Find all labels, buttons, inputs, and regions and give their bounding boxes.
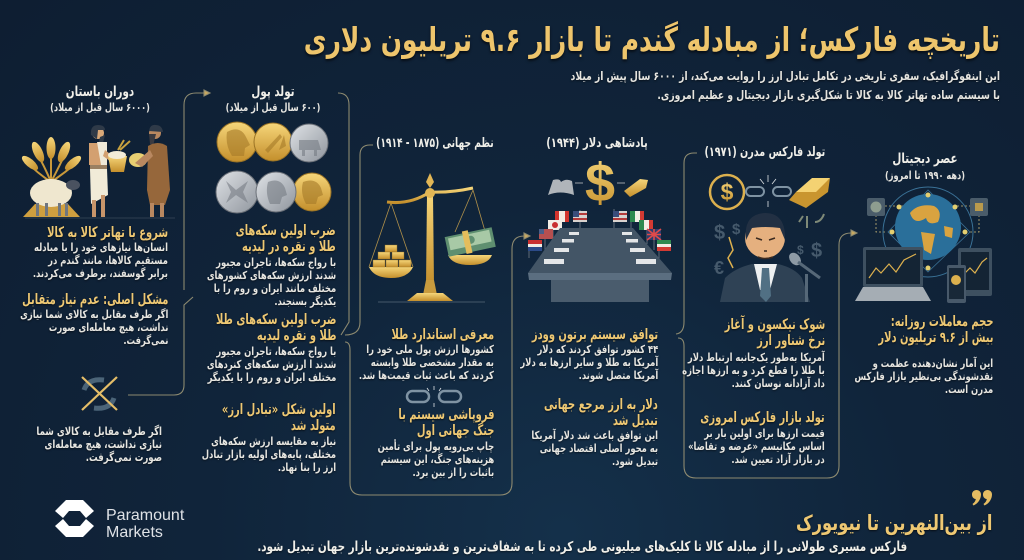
body: این توافق باعث شد دلار آمریکا	[531, 429, 658, 442]
heading: world order: نظم جهانی (۱۸۷۵ - ۱۹۱۴)	[376, 136, 494, 151]
intro text	[571, 69, 1000, 104]
icon: nixon, dollar and gold: $	[797, 243, 804, 257]
icon: nixon, dollar and gold: $	[732, 221, 741, 238]
wordmark: Markets	[106, 524, 163, 541]
body: یکدیگر بسنجند.	[274, 295, 336, 308]
body: با طلا را قطع کرد و به ارزها اجازه	[682, 364, 825, 377]
icon: broken chain	[406, 386, 462, 407]
subheading: بیش از ۹.۶ تریلیون دلار	[878, 330, 993, 346]
logo: Paramount Markets	[55, 500, 185, 538]
date: ancient era: (۶۰۰۰ سال قبل از میلاد)	[50, 101, 150, 114]
body	[682, 350, 825, 391]
heading: dollar empire: پادشاهی دلار (۱۹۴۴)	[546, 136, 648, 151]
body: آمریکا به طلا و سایر ارزها به دلار	[520, 356, 658, 369]
body: مختلف ایران و روم را با یکدیگر	[207, 371, 336, 384]
icon: nixon, dollar and gold: $	[714, 222, 725, 244]
icon: bretton woods table with flags: $	[585, 153, 615, 213]
heading: ancient era: دوران باستان	[66, 84, 134, 100]
body	[207, 256, 336, 309]
icon: nixon, dollar and gold: €	[714, 258, 724, 278]
body: در بازار آزاد تعیین شد.	[732, 453, 825, 466]
subheading: طلا و نقره در لیدیه	[242, 239, 336, 255]
closing quote block	[250, 488, 995, 558]
body	[20, 308, 168, 348]
text: first coins repeat	[207, 312, 336, 385]
body: با رواج سکه‌ها، تاجران مجبور	[216, 256, 336, 269]
panel: dollar empire	[520, 136, 672, 470]
subheading: ضرب اولین سکه‌های	[236, 223, 336, 239]
body: به مقدار مشخصی طلا وابسته	[371, 356, 494, 369]
body: کردند که باعث ثبات قیمت‌ها شد.	[359, 369, 494, 382]
text: modern forex birth	[694, 410, 825, 468]
icon: crossed exchange arrows	[81, 376, 118, 411]
text: first coins	[207, 223, 336, 309]
subheading	[222, 402, 336, 435]
subheading: دلار به ارز مرجع جهانی	[544, 397, 658, 413]
icon: nixon, dollar and gold	[708, 174, 830, 302]
subheading: توافق سیستم برتون وودز	[532, 327, 658, 343]
body: آمریکا متصل شوند.	[578, 369, 658, 382]
body	[202, 435, 336, 475]
body: ارز را بنا نهاد.	[278, 461, 336, 474]
date: digital age: (دهه ۱۹۹۰ تا امروز)	[885, 169, 965, 182]
closing heading: از بین‌النهرین تا نیویورک	[796, 511, 992, 535]
body	[377, 439, 494, 480]
subheading: فروپاشی سیستم با	[398, 407, 494, 423]
subheading	[398, 407, 494, 440]
wordmark	[106, 507, 184, 541]
body: مختلف مانند ایران و روم را با	[214, 282, 336, 295]
body	[688, 427, 825, 466]
text: daily volume	[852, 314, 993, 398]
subheading: مشکل اصلی: عدم نیاز متقابل	[22, 292, 168, 308]
subheading: نرخ شناور ارز	[757, 333, 825, 349]
date: birth of money: (۶۰۰ سال قبل از میلاد)	[226, 101, 320, 114]
text: dollar reserve	[531, 397, 658, 470]
text: bretton woods	[520, 327, 658, 384]
icon: barter scene	[22, 125, 175, 218]
subheading: معرفی استاندارد طلا	[391, 327, 494, 343]
callout text: اگر طرف مقابل به کالای شما	[36, 424, 162, 438]
heading: digital age: عصر دیجیتال	[892, 151, 958, 167]
text: barter start	[33, 225, 168, 281]
subheading: تولد بازار فارکس امروزی	[701, 410, 825, 426]
body: مختلف، پایه‌های اولیه بازار تبادل	[202, 448, 336, 461]
wordmark: Paramount	[106, 507, 184, 524]
subheading: شوک نیکسون و آغاز	[724, 317, 825, 333]
intro text: با سیستم ساده تهاتر کالا به کالا تا شکل‌گیری بازار دیجیتال و عظیم امروزی.	[657, 88, 1000, 102]
text: first currency exchange	[202, 402, 336, 475]
callout text: نیازی نداشت، هیچ معامله‌ای	[44, 437, 162, 451]
panel: world order	[359, 136, 496, 480]
body: مدرن است.	[945, 383, 993, 396]
subheading	[216, 312, 336, 345]
subheading	[724, 315, 825, 350]
subheading: حجم معاملات روزانه:	[890, 314, 993, 330]
subheading: طلا و نقره لیدیه	[257, 328, 336, 344]
body: کشورها ارزش پول ملی خود را	[366, 343, 494, 356]
subheading: متولد شد	[291, 418, 336, 434]
body: نمی‌گرفت.	[123, 334, 168, 347]
subheading: ضرب اولین سکه‌های طلا	[216, 312, 336, 328]
body: آمریکا به‌طور یک‌جانبه ارتباط دلار	[688, 351, 825, 364]
body: تبدیل شود.	[612, 455, 658, 468]
body	[359, 343, 494, 384]
body: ۴۴ کشور توافق کردند که دلار	[537, 343, 658, 356]
panel: ancient era	[20, 84, 175, 466]
subheading: جنگ جهانی اول	[416, 423, 494, 439]
title: تاریخچه فارکس؛ از مبادله گندم تا بازار ۹.۶ تریلیون دلاری	[304, 20, 1000, 59]
body: برابر گوسفند، برطرف می‌کردند.	[33, 267, 168, 280]
body: چاپ بی‌رویه پول برای تأمین	[377, 440, 494, 453]
callout text: صورت نمی‌گرفت.	[86, 450, 162, 464]
body	[531, 428, 658, 470]
intro text: این اینفوگرافیک، سفری تاریخی در تکامل تبادل ارز را روایت می‌کند، از ۶۰۰۰ سال پیش از میلاد	[571, 69, 1000, 83]
body: قیمت ارزها برای اولین بار بر	[705, 427, 825, 440]
body: اگر طرف مقابل به کالای شما نیازی	[20, 308, 168, 321]
body: با رواج سکه‌ها، تاجران مجبور	[216, 345, 336, 358]
heading: birth of money: تولد پول	[251, 84, 295, 100]
text: gold standard	[359, 327, 494, 384]
panel: modern forex	[682, 145, 830, 468]
icon: nixon, dollar and gold: $	[811, 240, 822, 262]
subheading	[878, 314, 993, 346]
icon: nixon, dollar and gold: $	[721, 179, 734, 205]
body: نیاز به مقایسه ارزش سکه‌های	[211, 435, 336, 448]
icon: balance scale	[368, 173, 496, 302]
panel: birth of money	[202, 84, 336, 475]
icon: quote mark	[972, 490, 992, 506]
body: این آمار نشان‌دهنده عظمت و	[872, 357, 993, 370]
body	[520, 343, 658, 384]
heading: modern forex: تولد فارکس مدرن (۱۹۷۱)	[704, 145, 825, 160]
subheading: تبدیل شد	[613, 413, 658, 429]
body: به محور اصلی اقتصاد جهانی	[540, 442, 658, 455]
text: nixon shock	[682, 315, 825, 391]
body: اساس مکانیسم «عرضه و تقاضا»	[688, 440, 825, 453]
closing text: فارکس مسیری طولانی را از مبادله کالا تا کلیک‌های میلیونی طی کرده تا به شفاف‌ترین و نقدشونده‌ترین بازار جهان تبدیل شود.	[257, 539, 907, 555]
body: نداشت، هیچ معامله‌ای صورت	[48, 321, 168, 334]
body	[207, 345, 336, 385]
subheading: شروع با تهاتر کالا به کالا	[47, 225, 168, 241]
icon: logo mark	[55, 500, 94, 537]
body: شدند ا ارزش سکه‌های کنردهای	[207, 358, 336, 371]
body: نقدشوندگی بی‌نظیر بازار فارکس	[854, 370, 993, 383]
text: system collapse	[377, 407, 494, 480]
icon: coins	[216, 122, 332, 214]
subheading	[236, 223, 336, 256]
callout text	[36, 424, 162, 466]
body: هزینه‌های جنگ، این سیستم	[381, 453, 494, 466]
body: باثبات را از بین برد.	[412, 466, 494, 479]
body: انسان‌ها نیازهای خود را با مبادله	[34, 241, 168, 254]
icon: bretton woods table with flags	[528, 153, 672, 302]
subheading: اولین شکل «تبادل ارز»	[222, 402, 336, 418]
icon: globe and devices	[852, 190, 994, 305]
body: داد آزادانه نوسان کنند.	[732, 377, 825, 390]
body: مستقیم کالاها، مانند گندم در	[48, 254, 168, 267]
subheading	[544, 397, 658, 429]
body	[854, 357, 993, 396]
body	[33, 241, 168, 281]
text: main problem	[20, 292, 168, 348]
panel: digital age	[852, 150, 994, 400]
body: شدند ارزش سکه‌های کشورهای	[207, 269, 336, 282]
